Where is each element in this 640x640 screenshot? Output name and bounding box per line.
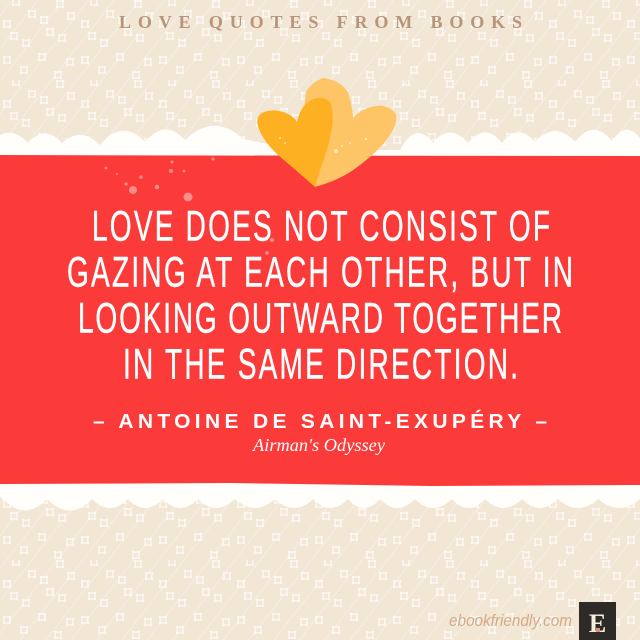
quote text: IN THE SAME DIRECTION.: [123, 340, 518, 388]
heart flecks: [279, 137, 367, 153]
paint splatter: [105, 157, 274, 255]
quote text: GAZING AT EACH OTHER, BUT IN: [67, 248, 573, 296]
front heart: [257, 98, 333, 187]
logo: ebookfriendly E: [579, 602, 616, 640]
quote text: [67, 202, 573, 388]
website credit: ebookfriendly.com: [449, 612, 572, 630]
top torn white paper edge: [0, 126, 640, 160]
quote text: LOOKING OUTWARD TOGETHER: [78, 294, 562, 342]
title: LOVE QUOTES FROM BOOKS: [119, 12, 522, 32]
author name: – ANTOINE DE SAINT-EXUPÉRY –: [93, 410, 547, 433]
back heart: [304, 78, 396, 187]
icon: two overlapping hearts: [257, 78, 396, 187]
book title: Airman's Odyssey: [252, 435, 385, 455]
red quote band: [0, 155, 640, 486]
logo: ebookfriendly E: E: [589, 609, 606, 638]
quote text: LOVE DOES NOT CONSIST OF: [92, 202, 550, 250]
bottom torn white paper edge: [0, 480, 640, 510]
